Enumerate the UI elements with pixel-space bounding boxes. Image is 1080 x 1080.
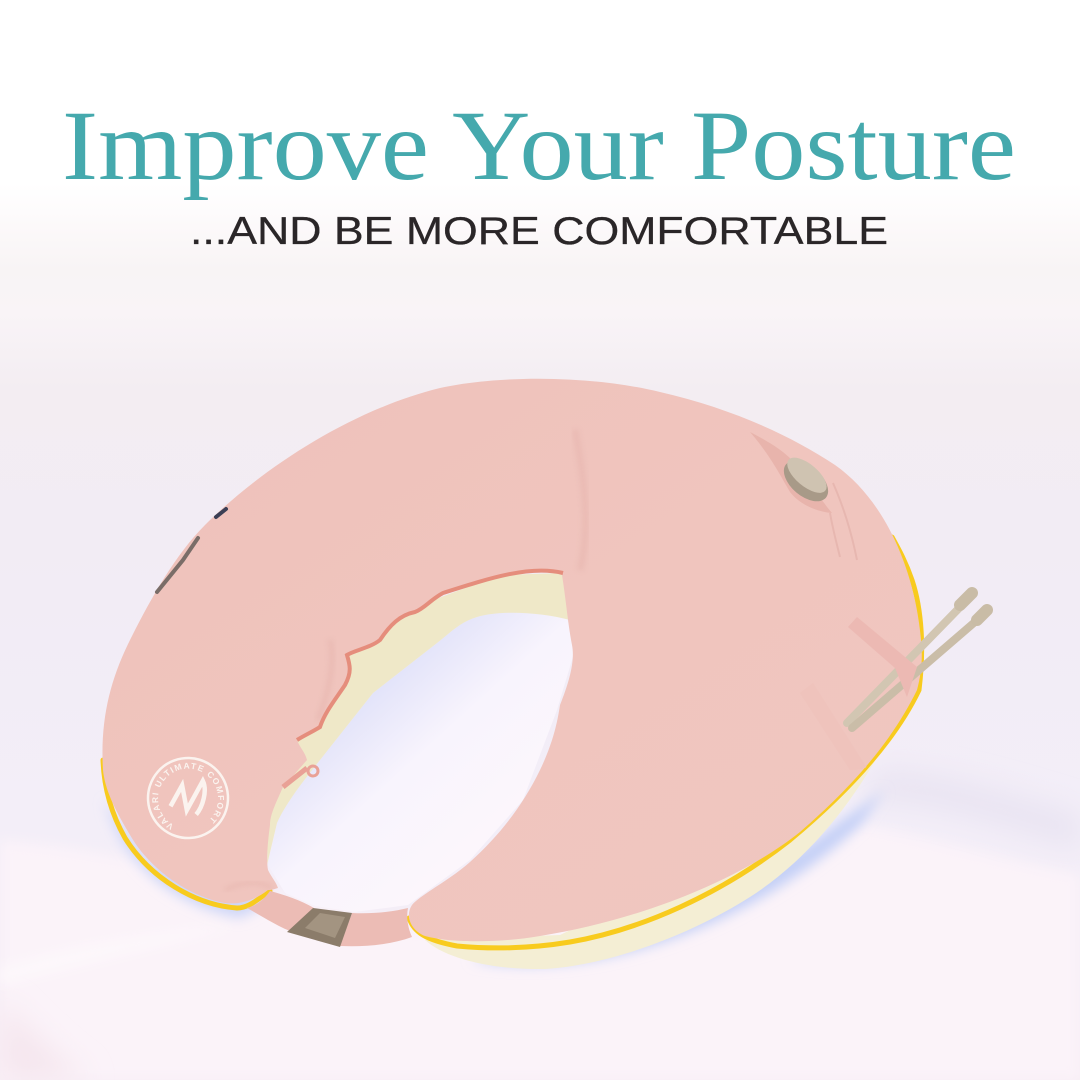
title: Improve Your Posture (62, 90, 1016, 201)
side pocket (800, 683, 866, 770)
cream inner lining (267, 573, 570, 865)
subtitle: ...AND BE MORE COMFORTABLE (190, 210, 888, 253)
zipper pull (283, 766, 318, 787)
strap over needles (848, 617, 917, 697)
body creases (225, 430, 585, 890)
pillow body (102, 379, 922, 941)
knitting needles (847, 593, 987, 728)
pillow shadow (105, 790, 885, 965)
centre opening (268, 611, 575, 912)
stitched seam (297, 571, 563, 740)
top pocket with metal flask (750, 432, 857, 560)
logo badge: VALARI ULTIMATE COMFORT (152, 762, 224, 830)
elastic strap right (340, 908, 412, 946)
cream underside (425, 752, 880, 969)
buckle (287, 908, 352, 947)
elastic strap left (247, 891, 314, 931)
left dark pocket edge (157, 509, 226, 592)
yellow piping (103, 537, 922, 948)
